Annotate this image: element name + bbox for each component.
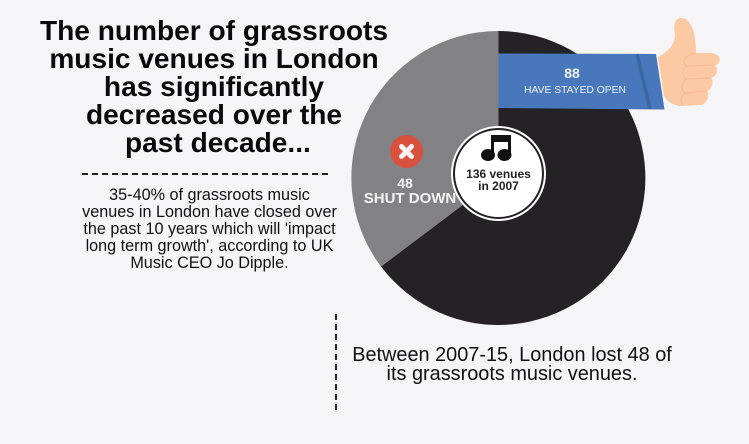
centre badge [451, 126, 546, 221]
label: have stayed open: HAVE STAYED OPEN [524, 85, 626, 96]
label: 136 venues [466, 167, 531, 193]
intro paragraph: Music CEO Jo Dipple. [130, 254, 289, 272]
label: 48 count: 48 [397, 175, 413, 191]
intro paragraph [82, 186, 337, 272]
label: shut down text: SHUT DOWN [364, 190, 456, 207]
icon: music notes [481, 135, 512, 161]
main title: music venues in London [49, 43, 379, 74]
icon: red cross [390, 135, 423, 168]
main title: past decade... [125, 127, 311, 158]
main title: decreased over the [86, 99, 342, 130]
intro paragraph: 35-40% of grassroots music [109, 186, 310, 204]
intro paragraph: the past 10 years which will 'impact [83, 220, 336, 238]
summary text [352, 344, 672, 385]
summary text: its grassroots music venues. [387, 363, 637, 385]
main title: has significantly [104, 71, 324, 102]
vertical divider [335, 314, 337, 410]
intro paragraph: long term growth', according to UK [86, 237, 333, 255]
intro paragraph: venues in London have closed over [82, 203, 337, 221]
icon: thumbs up hand [658, 18, 720, 106]
title divider [82, 173, 328, 175]
main title: The number of grassroots [40, 15, 388, 46]
slice: stayed open [381, 31, 645, 325]
label: 136 venues: 136 venues [466, 167, 531, 181]
blue sleeve [498, 54, 664, 110]
label: 136 venues: in 2007 [478, 179, 519, 193]
main title [40, 15, 388, 158]
label: 88 count: 88 [564, 65, 580, 81]
summary text: Between 2007-15, London lost 48 of [352, 344, 672, 366]
slice: shut down [351, 31, 498, 266]
